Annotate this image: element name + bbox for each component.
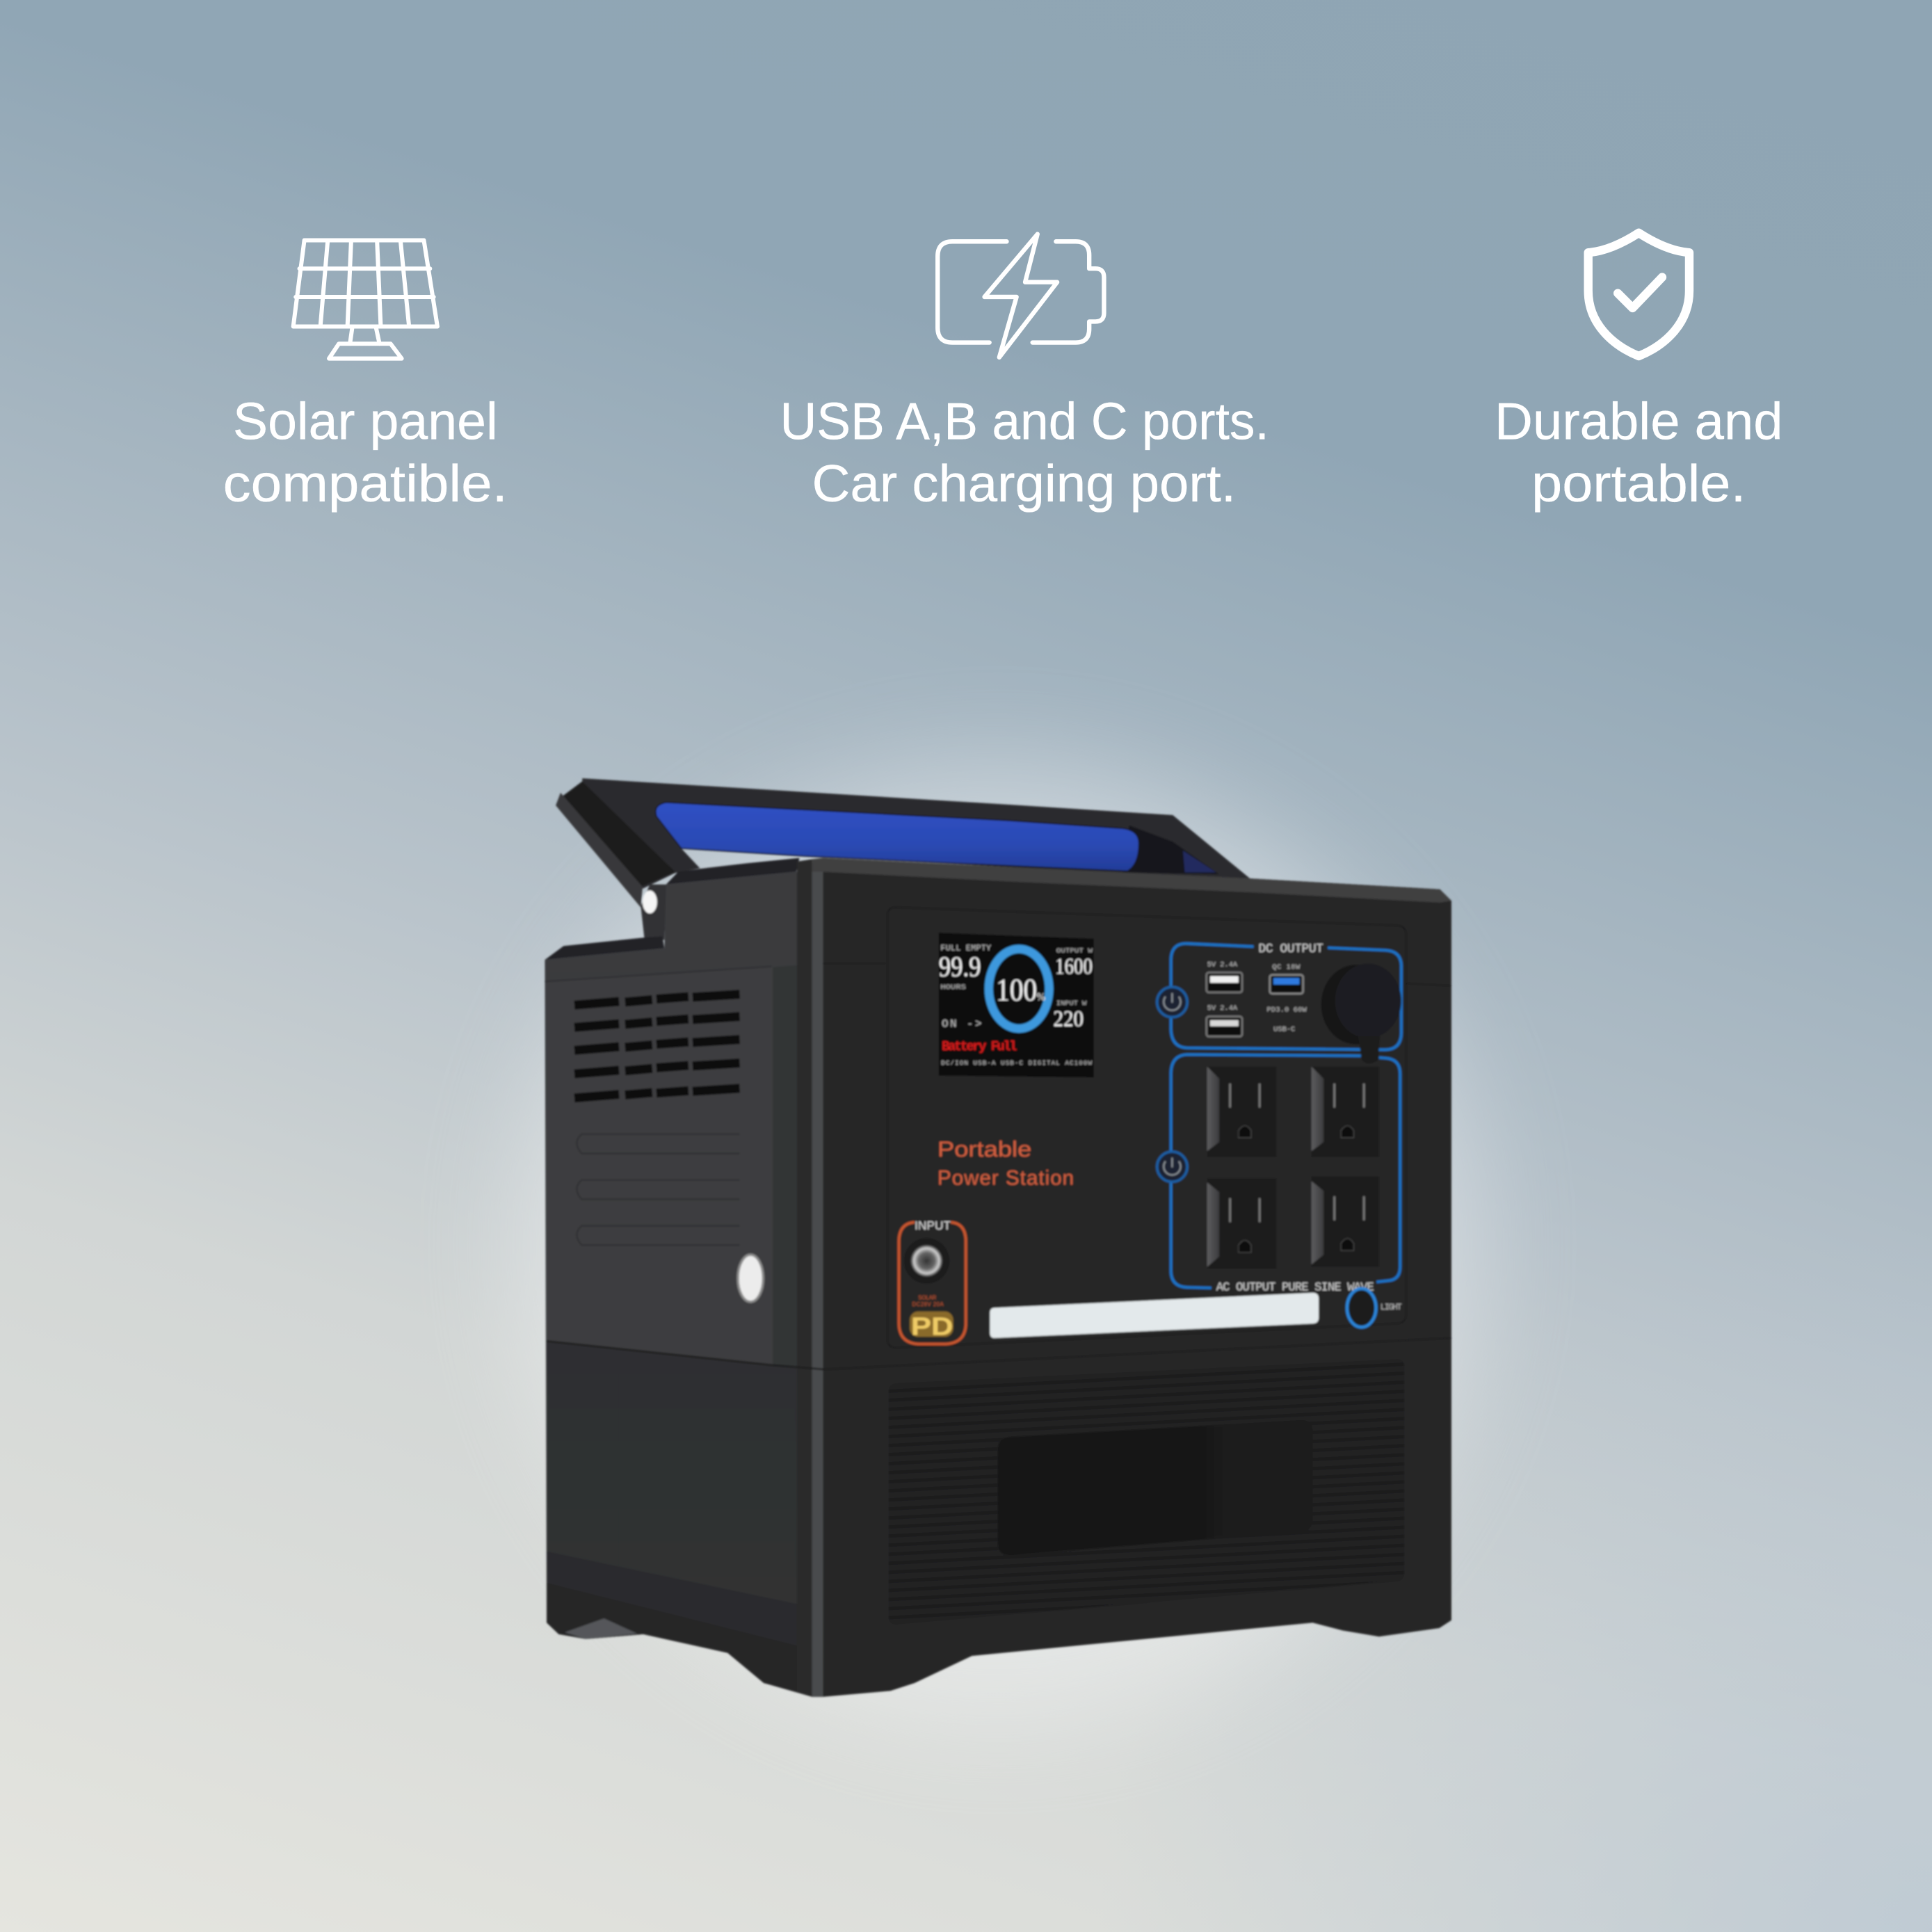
DC labels: 5V 2.4A bbox=[1207, 1004, 1238, 1013]
side upper top face bbox=[666, 858, 799, 885]
input small text: SOLAR bbox=[918, 1294, 937, 1301]
screen readings bbox=[939, 951, 1093, 1032]
screen labels: INPUT W bbox=[1056, 999, 1087, 1007]
AC socket top left bbox=[1207, 1067, 1276, 1157]
USB-C port bbox=[1270, 975, 1303, 994]
lower side shade deep bbox=[547, 1583, 797, 1691]
side door seam bbox=[545, 967, 772, 981]
screen readings: 1600 bbox=[1055, 954, 1093, 979]
PD badge: PD bbox=[911, 1312, 953, 1341]
light label: LIGHT bbox=[1380, 1302, 1402, 1312]
input title: INPUT bbox=[915, 1218, 951, 1232]
caption: USB ports: USB A,B and C ports. bbox=[780, 392, 1269, 451]
lower side shade bbox=[547, 1552, 797, 1691]
front face bbox=[823, 858, 1451, 1697]
light button bbox=[1347, 1289, 1376, 1327]
side face bbox=[545, 858, 823, 1697]
brand label: Power Station bbox=[937, 1167, 1074, 1190]
feature: durable bbox=[1495, 233, 1783, 513]
screen labels: HOURS bbox=[940, 983, 966, 992]
DC labels: 5V 2.4A bbox=[1207, 961, 1238, 969]
input frame bbox=[899, 1222, 966, 1344]
AC socket bottom left bbox=[1207, 1178, 1276, 1269]
corner dark strip bbox=[797, 859, 812, 1694]
lower ribbed grille bbox=[889, 1359, 1404, 1625]
front top bevel bbox=[812, 858, 1451, 903]
handle blue grip bbox=[656, 803, 1139, 871]
body seam bbox=[547, 1338, 1451, 1369]
lower grille window bbox=[998, 1420, 1312, 1555]
handle frame bbox=[582, 778, 1250, 889]
battery full message: Battery Full bbox=[942, 1039, 1017, 1054]
rear foot highlight bbox=[565, 1618, 637, 1639]
screen labels: ON -> bbox=[942, 1017, 981, 1030]
screen readings: 99.9 bbox=[939, 951, 981, 983]
caption: USB ports: Car charging port. bbox=[812, 454, 1236, 513]
brand label: Portable bbox=[937, 1137, 1031, 1161]
DC frame bbox=[1171, 944, 1401, 1049]
DC labels: PD3.0 60W bbox=[1267, 1006, 1307, 1015]
side door panel bbox=[547, 967, 773, 1365]
DC title: DC OUTPUT bbox=[1258, 942, 1323, 956]
feature: solar panel bbox=[223, 240, 508, 513]
corner light strip bbox=[812, 858, 823, 1697]
side lower top face bbox=[545, 936, 664, 960]
AC socket bottom right bbox=[1312, 1176, 1379, 1267]
battery ring bbox=[989, 949, 1049, 1029]
screen readings: 220 bbox=[1054, 1007, 1084, 1032]
handle pivot bbox=[641, 885, 668, 940]
DC labels: USB-C bbox=[1273, 1025, 1295, 1033]
input connector bbox=[903, 1238, 949, 1284]
caption: solar panel: Solar panel bbox=[233, 392, 498, 451]
side latch bbox=[738, 1255, 763, 1302]
product glow halo bbox=[517, 764, 1479, 1725]
caption: durable: portable. bbox=[1531, 454, 1746, 513]
screen labels bbox=[940, 943, 1093, 1067]
AC power button bbox=[1157, 1152, 1187, 1182]
screen labels: DC/ION USB-A USB-C DIGITAL AC100W bbox=[941, 1059, 1092, 1067]
input rating: DC28V 20A bbox=[912, 1301, 944, 1307]
front upper band line bbox=[823, 963, 1451, 985]
icon: battery with bolt bbox=[937, 234, 1104, 357]
handle right opening bbox=[1122, 826, 1219, 874]
side lower panel bbox=[547, 1341, 797, 1609]
screen readings: % bbox=[1036, 991, 1045, 1003]
screen labels: OUTPUT W bbox=[1056, 947, 1093, 955]
DC power button bbox=[1157, 987, 1187, 1017]
USB-A ports bbox=[1207, 972, 1242, 1036]
DC output group bbox=[1157, 942, 1401, 1063]
white label bar bbox=[990, 1293, 1319, 1338]
DC labels: QC 18W bbox=[1272, 963, 1301, 972]
handle arm outer face bbox=[556, 793, 643, 908]
corner strip bbox=[773, 965, 797, 1368]
control panel recess bbox=[887, 908, 1406, 1348]
feature: USB ports bbox=[780, 234, 1269, 513]
AC title: AC OUTPUT PURE SINE WAVE bbox=[1216, 1281, 1374, 1294]
side grooves bbox=[577, 1134, 740, 1245]
AC frame bbox=[1171, 1054, 1400, 1288]
screen labels: FULL EMPTY bbox=[940, 943, 992, 953]
caption: solar panel: compatible. bbox=[223, 454, 508, 513]
icon: solar panel bbox=[293, 240, 437, 359]
brand label bbox=[937, 1137, 1074, 1190]
LCD screen bbox=[939, 933, 1094, 1077]
icon: shield with check bbox=[1588, 233, 1689, 356]
AC output group bbox=[1157, 1054, 1400, 1294]
DC labels bbox=[1207, 961, 1307, 1033]
input port group bbox=[899, 1218, 966, 1344]
handle arm dark face bbox=[561, 781, 675, 887]
handle bolt bbox=[643, 890, 657, 913]
caption: durable: Durable and bbox=[1495, 392, 1783, 451]
car charger port bbox=[1321, 963, 1401, 1063]
screen readings: 100 bbox=[996, 972, 1037, 1007]
product: portable power station bbox=[545, 778, 1451, 1697]
handle dark blue interior bbox=[1183, 851, 1216, 872]
side vents bbox=[574, 995, 740, 1098]
AC socket top right bbox=[1312, 1067, 1379, 1157]
